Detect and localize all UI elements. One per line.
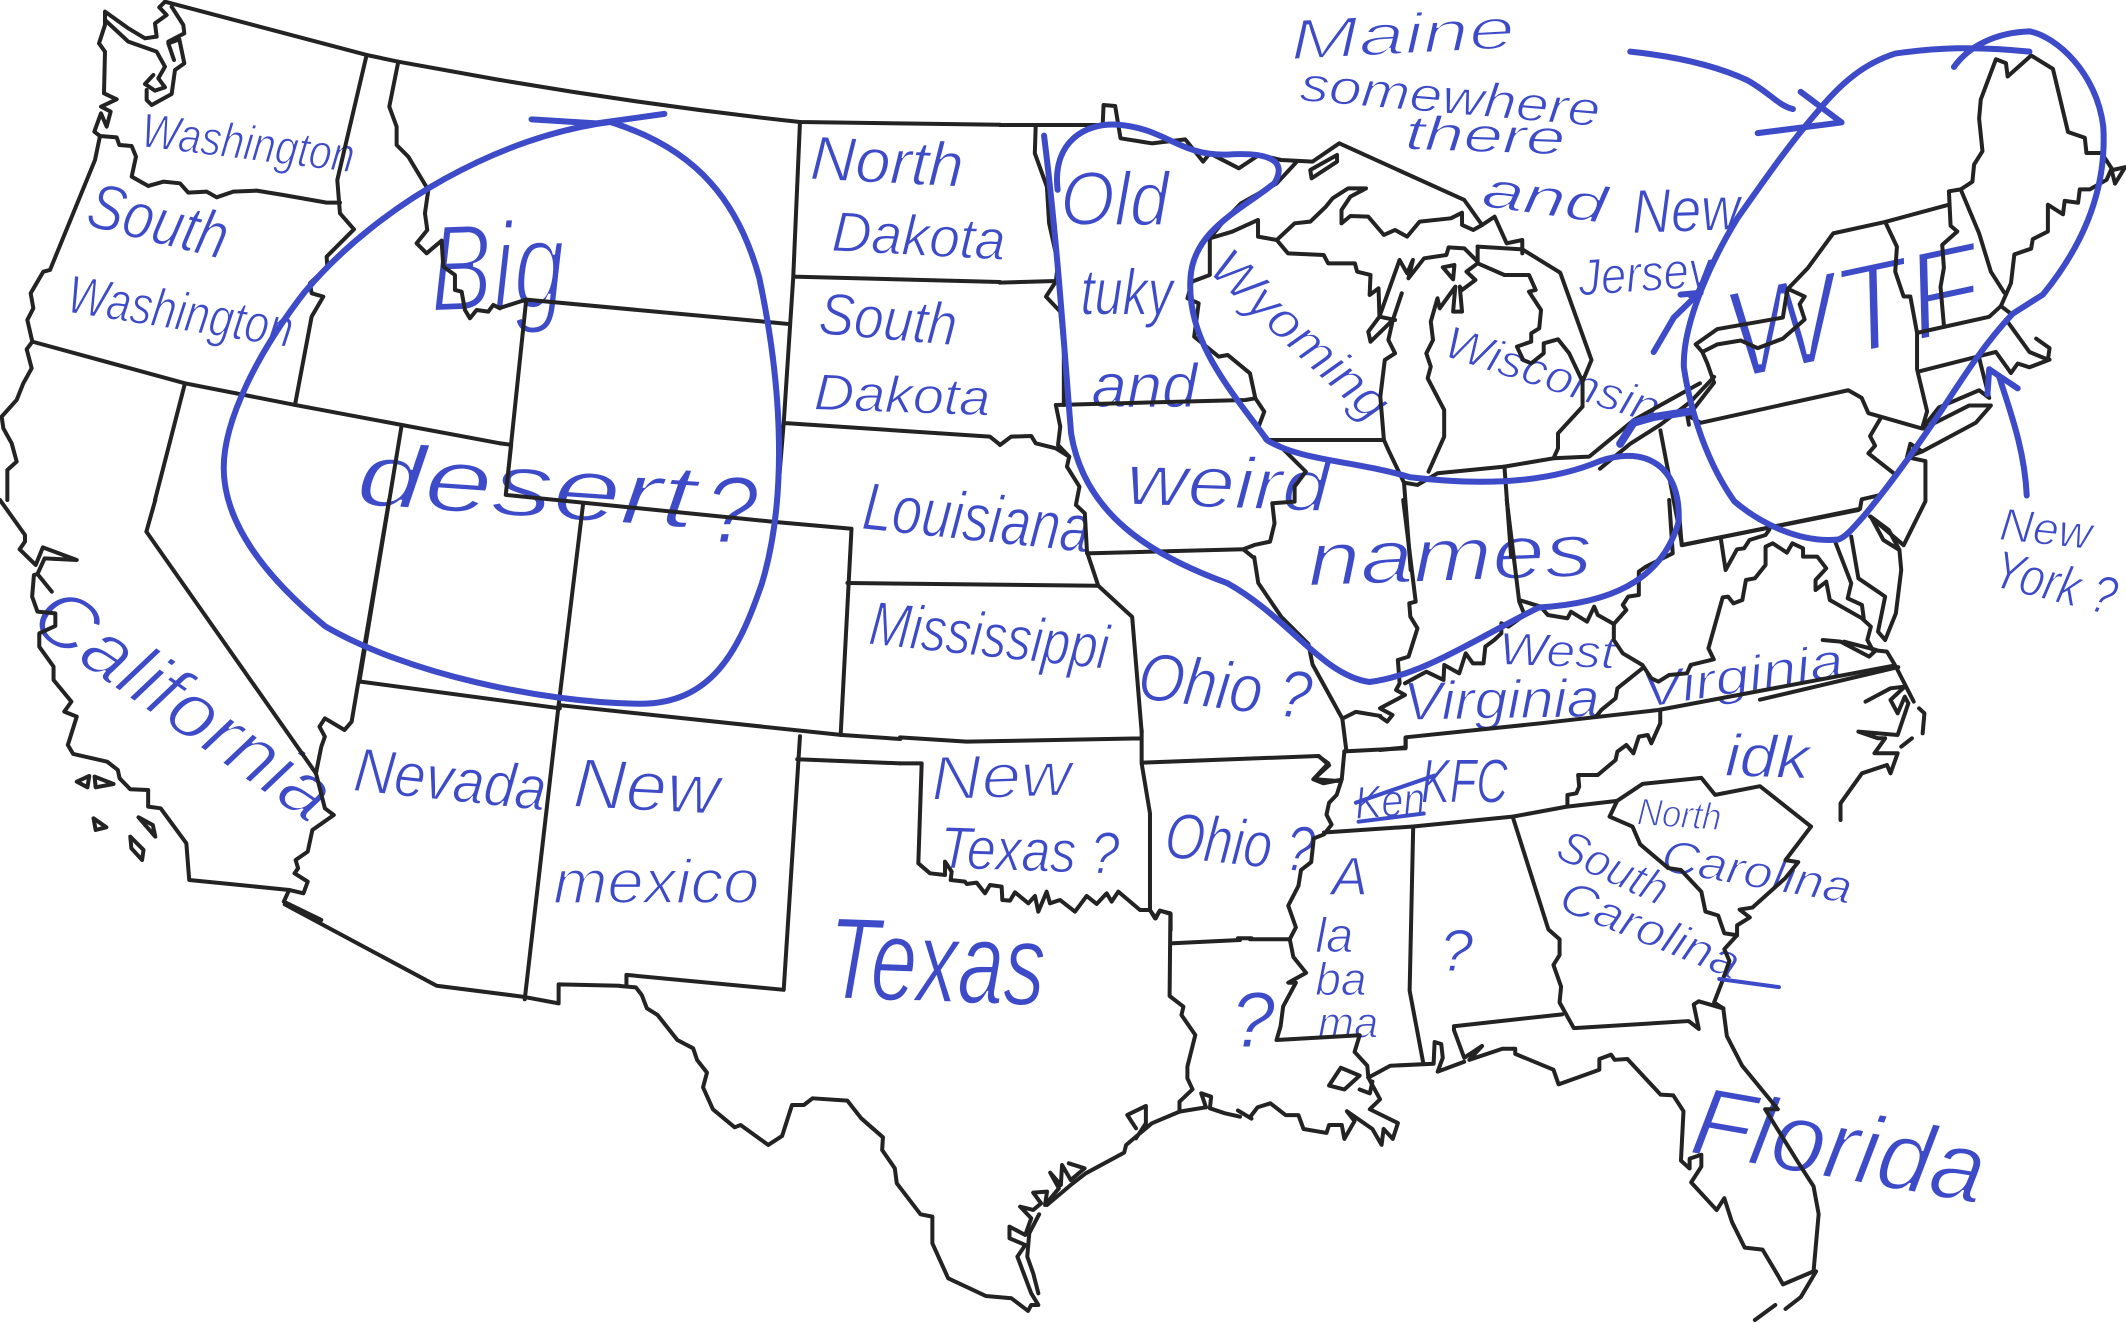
label: South (Carolina): South	[1550, 819, 1677, 915]
label: New (Jersey): New	[1631, 174, 1745, 247]
label: Washington: Washington	[138, 104, 358, 183]
label: Wisconsin (Michigan): Wisconsin	[1438, 315, 1667, 434]
outline: upper midwest and Great Lakes	[1000, 105, 1700, 570]
label: Texas: Texas	[826, 892, 1048, 1030]
label: Old: Old	[1060, 157, 1171, 242]
label: and: and	[1479, 160, 1614, 235]
outline: Ohio valley and mid-Atlantic	[1380, 500, 1924, 820]
label: question mark (Mississippi): ?	[1231, 976, 1275, 1064]
label: ma: ma	[1318, 999, 1378, 1047]
label: Ohio (Missouri): Ohio ?	[1134, 639, 1316, 734]
scribble: thick stroke trailing Wisconsin	[1620, 411, 1691, 444]
label: Carolina (south): Carolina	[1553, 870, 1748, 989]
circled region: old tribes and weird names	[1044, 125, 1679, 682]
label: South: South	[81, 168, 236, 273]
outline: southeast states and Florida	[1250, 738, 1819, 1320]
label: Virginia: Virginia	[1638, 633, 1847, 719]
label: tribes: tuky	[1081, 256, 1176, 329]
outline: northwest coast, Washington and Oregon	[2, 2, 500, 500]
label: New (Texas): New	[930, 740, 1077, 814]
label: Washington (south): Washington	[63, 264, 298, 359]
label: New (Mexico): New	[571, 743, 726, 830]
label: A: A	[1328, 847, 1368, 907]
label: North (Carolina): North	[1636, 791, 1723, 839]
label: Carolina (north): Carolina	[1658, 829, 1857, 914]
label: Ohio (Arkansas): Ohio ?	[1162, 798, 1318, 886]
label: Florida: Florida	[1684, 1066, 1994, 1225]
label: Dakota (north): Dakota	[830, 200, 1007, 273]
label: mexico: mexico	[553, 848, 759, 917]
label: California: California	[17, 568, 351, 839]
label: desert: desert	[354, 424, 703, 547]
label: idk: idk	[1724, 722, 1814, 792]
arrow: New York note pointing up	[1988, 369, 2027, 495]
outline: Texas coast, Rio Grande and Sabine border	[620, 910, 1240, 1311]
outline: northeast states	[1600, 55, 2125, 545]
strike and underline strokes on labels	[1356, 776, 1779, 987]
label: Louisiana: Louisiana	[859, 469, 1094, 568]
label: Mississippi: Mississippi	[866, 589, 1114, 683]
label: desert question mark: ?	[705, 457, 758, 563]
outline: California, Nevada line and islands	[0, 500, 560, 920]
label: New (York): New	[1998, 498, 2097, 560]
label: South (Dakota): South	[816, 280, 960, 359]
label: Ken struck out: Ken	[1353, 772, 1427, 829]
label: Wyoming (Wisconsin): Wyoming	[1199, 237, 1403, 432]
label: West: West	[1498, 622, 1619, 679]
label: names: names	[1306, 508, 1594, 603]
circled region: big desert	[224, 114, 779, 704]
label: weird: weird	[1125, 438, 1334, 528]
arrow: into northeast circle from New Jersey	[1654, 293, 1701, 352]
label: Texas ? (Oklahoma): Texas ?	[939, 814, 1120, 887]
label: Maine: Maine	[1288, 0, 1516, 73]
label: Nevada: Nevada	[351, 736, 550, 825]
label: Virginia (Kentucky): Virginia	[1403, 669, 1600, 732]
circled region: northeast WTF	[1684, 31, 2104, 540]
label: KFC: KFC	[1421, 748, 1508, 817]
label: Dakota (south): Dakota	[813, 363, 991, 427]
label: North (Dakota): North	[809, 124, 965, 201]
label: question mark (Alabama): ?	[1440, 917, 1473, 984]
label: la: la	[1315, 909, 1353, 963]
label: and: and	[1091, 352, 1200, 421]
label: Jersey: Jersey	[1575, 239, 1716, 307]
label: ba: ba	[1315, 953, 1367, 1005]
outline: Oklahoma and Arkansas	[900, 730, 1340, 930]
label: somewhere: somewhere	[1298, 58, 1603, 138]
label: there: there	[1404, 106, 1566, 166]
label: WTF: WTF	[1712, 215, 1999, 406]
outline: western and central state borders	[285, 80, 1898, 1119]
label: Big: Big	[427, 195, 568, 339]
arrow: Maine note pointing to northeast circle	[1630, 52, 1842, 133]
